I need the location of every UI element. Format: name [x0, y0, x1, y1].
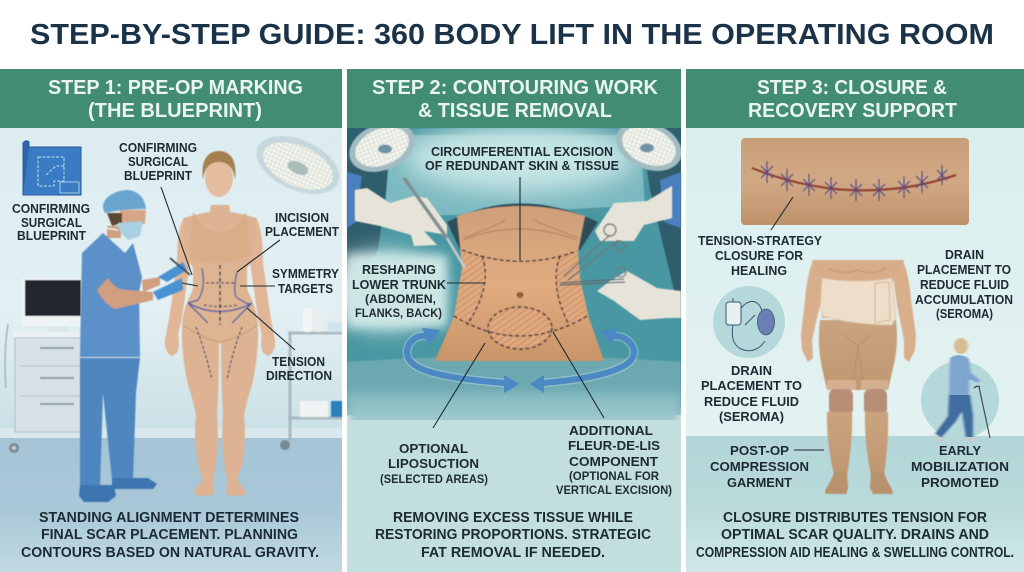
icon: surgical drain [713, 286, 785, 358]
step 3 summary text: OPTIMAL SCAR QUALITY. DRAINS AND [721, 527, 989, 543]
step 2 header bar [347, 69, 681, 128]
operating room background [0, 128, 342, 572]
icon: blueprint [23, 141, 81, 195]
label: incision placement: INCISION [275, 210, 329, 225]
label: early mobilization promoted: PROMOTED [921, 475, 999, 490]
step 1 summary text: STANDING ALIGNMENT DETERMINES [39, 510, 299, 526]
label: reshaping lower trunk: LOWER TRUNK [352, 277, 447, 292]
label: reshaping lower trunk: RESHAPING [362, 262, 436, 277]
step 1 summary text: FINAL SCAR PLACEMENT. PLANNING [41, 527, 298, 543]
label: drain placement right: (SEROMA) [936, 306, 993, 321]
step 1 header bar [0, 69, 342, 128]
image: sutured incision [741, 138, 969, 225]
label: early mobilization promoted: EARLY [939, 443, 981, 458]
step 1 summary text: CONTOURS BASED ON NATURAL GRAVITY. [21, 545, 319, 561]
step 2 summary text [375, 510, 651, 561]
step 2 header bar: STEP 2: CONTOURING WORK [372, 76, 658, 99]
label: drain placement left [701, 363, 802, 424]
label: confirming surgical blueprint (top) [119, 140, 197, 183]
surgeon hands and instruments [347, 172, 681, 320]
label: tension direction: DIRECTION [266, 368, 332, 383]
step 2 summary text: REMOVING EXCESS TISSUE WHILE [393, 510, 633, 526]
step 2 summary text: FAT REMOVAL IF NEEDED. [421, 545, 605, 561]
label: tension-strategy closure [698, 233, 822, 278]
callout leader lines [161, 187, 295, 350]
label: symmetry targets: SYMMETRY [272, 266, 339, 281]
instrument cart [280, 308, 342, 450]
label: confirming surgical blueprint (left) [12, 201, 90, 243]
label: drain placement left: DRAIN [731, 363, 772, 378]
callout leader lines [433, 177, 604, 428]
label: tension-strategy closure: TENSION-STRATEGY [698, 233, 822, 248]
label: circumferential excision: OF REDUNDANT SKIN & TISSUE [425, 158, 619, 173]
circular arrows [407, 328, 634, 393]
label: optional liposuction: OPTIONAL [399, 441, 468, 456]
label: optional liposuction: LIPOSUCTION [388, 456, 479, 471]
label: additional fleur-de-lis component [556, 423, 672, 497]
figure: patient in compression garment [801, 260, 916, 494]
label: additional fleur-de-lis component: VERTICAL EXCISION) [556, 483, 672, 497]
label: drain placement left: REDUCE FLUID [704, 394, 799, 409]
label: drain placement right [915, 247, 1013, 321]
label: tension direction [266, 354, 332, 383]
label: confirming surgical blueprint (top): SURGICAL [128, 154, 188, 169]
panel: step 1 pre-op marking [0, 69, 348, 572]
callout leader lines [771, 197, 824, 450]
label: confirming surgical blueprint (top): CONFIRMING [119, 140, 197, 155]
step 2 header bar: & TISSUE REMOVAL [418, 99, 612, 122]
label: early mobilization promoted: MOBILIZATION [911, 459, 1009, 474]
label: circumferential excision: CIRCUMFERENTIAL EXCISION [431, 144, 613, 159]
label: drain placement left: (SEROMA) [719, 409, 784, 424]
step 2 summary text: RESTORING PROPORTIONS. STRATEGIC [375, 527, 651, 543]
surgical drape background [330, 124, 681, 572]
figure: early walking patient [921, 338, 999, 442]
title: STEP-BY-STEP GUIDE: 360 BODY LIFT IN THE OPERATING ROOM [30, 19, 994, 51]
panel: step 2 contouring work and tissue removal [330, 69, 689, 572]
label: early mobilization promoted [911, 443, 1009, 490]
monitor and cabinet [5, 278, 85, 453]
label: symmetry targets: TARGETS [278, 281, 333, 296]
label: optional liposuction: (SELECTED AREAS) [380, 472, 488, 486]
label: additional fleur-de-lis component: COMPONENT [569, 454, 658, 469]
step 1 header bar: (THE BLUEPRINT) [88, 99, 262, 122]
clinic background [686, 128, 1024, 572]
label: confirming surgical blueprint (left): CONFIRMING [12, 201, 90, 216]
surgical lamp [256, 136, 340, 194]
step 3 header bar: STEP 3: CLOSURE & [757, 76, 947, 99]
label: reshaping lower trunk: (ABDOMEN, [365, 292, 436, 306]
label: post-op compression garment: POST-OP [730, 443, 789, 458]
label: incision placement: PLACEMENT [265, 224, 339, 239]
label: circumferential excision [425, 144, 619, 173]
label: post-op compression garment [710, 443, 809, 490]
label: tension-strategy closure: HEALING [731, 263, 787, 278]
label: confirming surgical blueprint (left): SURGICAL [21, 215, 82, 230]
label: reshaping lower trunk: FLANKS, BACK) [355, 306, 442, 320]
step 3 header bar: RECOVERY SUPPORT [748, 99, 957, 122]
label: symmetry targets [272, 266, 339, 296]
label: drain placement right: REDUCE FLUID [920, 277, 1009, 292]
label: additional fleur-de-lis component: ADDITIONAL [569, 423, 653, 438]
label: confirming surgical blueprint (left): BLUEPRINT [17, 228, 86, 243]
label: drain placement right: DRAIN [945, 247, 984, 262]
figure: surgeon [79, 190, 190, 502]
figure: patient with surgical markings [165, 151, 275, 496]
exposed torso with excision markings [435, 204, 604, 361]
step 1 summary text [21, 510, 319, 561]
step 1 header bar: STEP 1: PRE-OP MARKING [48, 76, 303, 99]
label: additional fleur-de-lis component: (OPTIONAL FOR [569, 469, 659, 483]
step 3 header bar [686, 69, 1024, 128]
label: post-op compression garment: GARMENT [727, 475, 792, 490]
label: drain placement left: PLACEMENT TO [701, 378, 802, 393]
label: tension direction: TENSION [272, 354, 325, 369]
label: incision placement [265, 210, 339, 239]
step 3 summary text: CLOSURE DISTRIBUTES TENSION FOR [723, 510, 987, 526]
label: post-op compression garment: COMPRESSION [710, 459, 809, 474]
label: tension-strategy closure: CLOSURE FOR [715, 248, 804, 263]
label: confirming surgical blueprint (top): BLUEPRINT [124, 168, 192, 183]
panel: step 3 closure and recovery support [686, 69, 1024, 572]
label: optional liposuction [380, 441, 488, 486]
label: reshaping lower trunk [352, 262, 447, 320]
step 3 summary text [696, 510, 1014, 561]
label: drain placement right: PLACEMENT TO [917, 262, 1011, 277]
label: drain placement right: ACCUMULATION [915, 292, 1013, 307]
surgical lamps [348, 128, 681, 172]
label: additional fleur-de-lis component: FLEUR-DE-LIS [568, 438, 660, 453]
